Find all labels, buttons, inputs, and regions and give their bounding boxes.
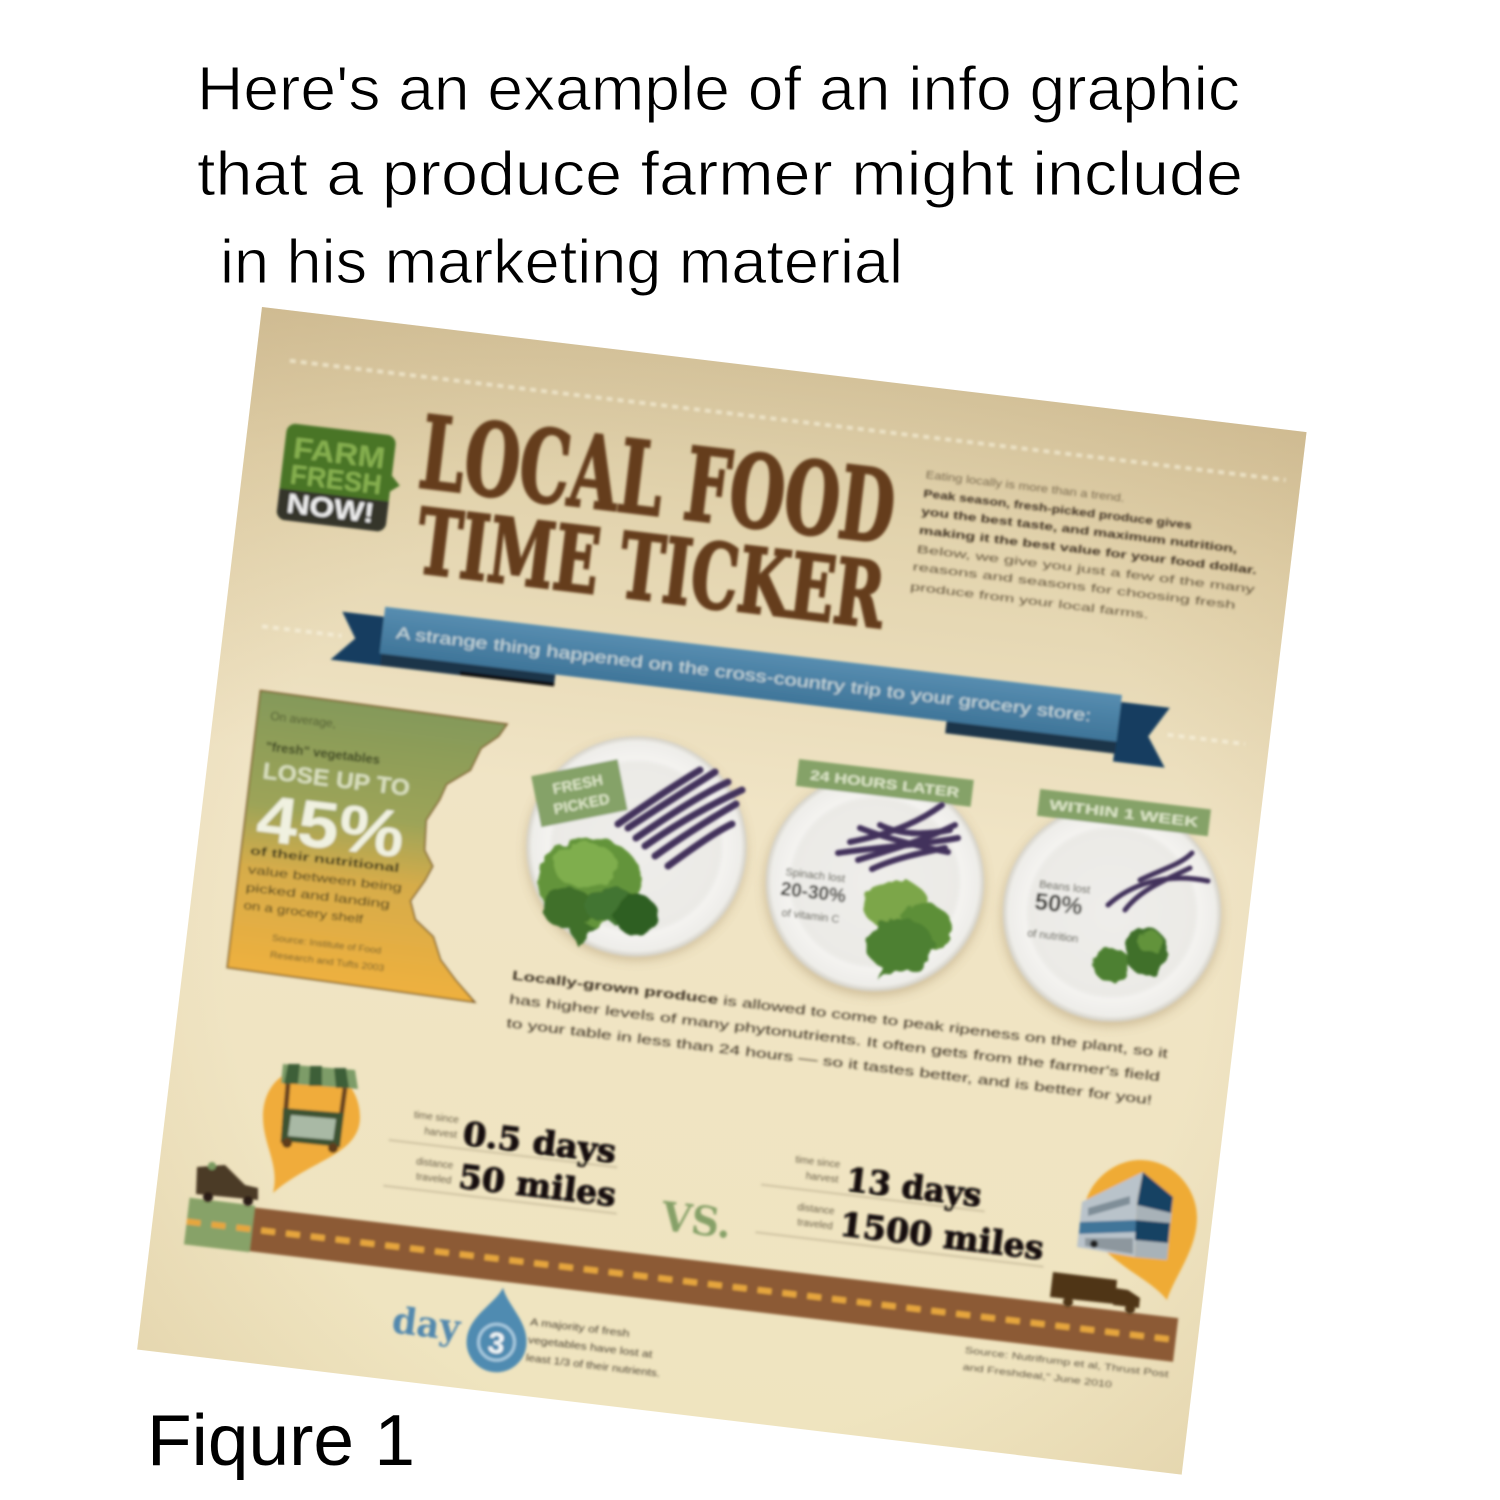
panel: lose up to 45%: Source: Institute of Food [271,933,382,956]
panel: lose up to 45% [227,691,509,1002]
stats: local food: 0.5 days [461,1114,618,1171]
panel: lose up to 45%: Research and Tufts 2003 [269,950,385,973]
heading: handwritten intro text [197,55,1243,297]
stats: local food: traveled [415,1172,452,1187]
plate label: beans lost: of nutrition [1027,927,1079,946]
paragraph: locally-grown produce: Locally-grown produce is allowed to come to peak ripeness on the plant, so it [511,969,1169,1061]
intro paragraph: Eating locally is more than a trend. [925,469,1125,505]
panel: tilted Local Food Time Ticker poster [137,307,1307,1475]
panel: lose up to 45%: On average, [270,709,337,731]
source note [962,1345,1170,1396]
panel: lose up to 45%: of their nutritional [249,844,400,875]
poster paper background [137,307,1307,1475]
plate label: spinach lost: 20-30% [779,879,847,908]
heading: handwritten intro text: in his marketing material [220,228,903,297]
intro paragraph: Below, we give you just a few of the many [916,544,1256,596]
icon: farm truck [196,1162,258,1206]
source note: and Freshdeal," June 2010 [962,1362,1112,1390]
tag: within 1 week: WITHIN 1 WEEK [1049,796,1199,830]
stats: grocery store food: traveled [797,1217,833,1232]
badge: Farm Fresh Now: NOW! [285,487,376,529]
day 3 marker [388,1275,533,1376]
plate label: beans lost: Beans lost [1038,879,1091,897]
heading: handwritten intro text: that a produce farmer might include [197,140,1243,209]
intro paragraph: reasons and seasons for choosing fresh [912,561,1236,612]
plate label: beans lost: 50% [1033,888,1084,921]
illustration: road-side icons and produce [196,770,1208,1314]
plate 3 [989,791,1234,1039]
title: LOCAL FOOD [414,393,902,567]
plate label: spinach lost: Spinach lost [785,866,846,885]
purple beans, plate 1 [618,770,742,866]
spinach, plate 1 [538,838,658,948]
day 3 marker: day [390,1300,463,1350]
stats: local food: time since [413,1110,460,1126]
stats: grocery store food: harvest [805,1171,839,1186]
stats: grocery store food: 13 days [844,1160,984,1215]
stats: grocery store food: distance [797,1202,836,1218]
spinach, plate 3 [1093,928,1168,982]
text: a majority of fresh vegetables: A majority of fresh [529,1316,630,1340]
intro paragraph: Peak season, fresh-picked produce gives [923,488,1192,532]
tag: fresh picked: FRESH [551,772,604,798]
plate 1 [514,724,759,973]
title [404,393,902,650]
tag: fresh picked: PICKED [552,791,611,818]
panel: lose up to 45%: picked and landing [245,880,391,911]
stats: local food: distance [416,1156,454,1172]
stats: local food: harvest [424,1126,458,1141]
heading: handwritten intro text: Here's an example of an info graphic [197,55,1240,124]
panel: lose up to 45%: "fresh" vegetables [265,739,381,767]
dotted line top [290,361,1286,480]
badge: Farm Fresh Now: FRESH [288,459,384,500]
plate label: spinach lost [777,866,849,926]
paragraph: locally-grown produce: has higher levels of many phytonutrients. It often gets from the farmer's field [509,992,1161,1084]
paragraph: locally-grown produce: to your table in less than 24 hours — so it tastes better, and is better for you! [506,1016,1153,1107]
panel: lose up to 45%: LOSE UP TO [261,757,411,801]
source note: Source: Nutrifrump et al, Thrust Post [964,1345,1170,1379]
text: a majority of fresh vegetables: vegetables have lost at [527,1334,653,1361]
stats: local food [383,1105,626,1215]
stats: local food: 50 miles [457,1157,618,1214]
tag: within 1 week [1037,789,1211,836]
purple beans, plate 3 [1108,853,1208,910]
icon: delivery truck [1050,1272,1140,1314]
badge: Farm Fresh Now: FARM [291,432,387,476]
road with green field start [184,1198,1178,1363]
panel: lose up to 45%: on a grocery shelf [243,898,365,926]
icon: map pin with farm stand [263,1064,360,1193]
plate label: spinach lost: of vitamin C [781,907,840,926]
plate 2 [752,761,997,1008]
purple beans, plate 2 [838,805,958,869]
plate label: beans lost [1027,878,1091,946]
stats: grocery store food: 1500 miles [838,1204,1046,1267]
stats: grocery store food [755,1150,1053,1268]
intro paragraph: making it the best value for your food dollar. [918,525,1257,577]
tag: 24 hours later [796,759,974,807]
text: a majority of fresh vegetables [525,1316,665,1380]
badge: Farm Fresh Now [276,423,406,533]
text: a majority of fresh vegetables: least 1/3 of their nutrients. [525,1352,661,1380]
paragraph: locally-grown produce [506,969,1169,1109]
intro paragraph: produce from your local farms. [910,581,1149,622]
banner ribbon [330,601,1173,768]
title: TIME TICKER [411,489,891,650]
panel: lose up to 45%: 45% [253,780,409,871]
tag: 24 hours later: 24 HOURS LATER [809,767,960,800]
caption: figure 1: Fiqure 1 [147,1401,415,1481]
panel: lose up to 45%: value between being [247,862,403,895]
icon: map pin with supermarket [1077,1160,1197,1300]
banner ribbon: A strange thing happened on the cross-country trip to your grocery store: [395,623,1092,725]
spinach, plate 2 [863,880,952,979]
intro paragraph: you the best taste, and maximum nutrition, [921,506,1238,556]
intro paragraph [910,469,1265,634]
day 3 marker: 3 [486,1326,507,1361]
tag: fresh picked [531,759,628,827]
vs label: VS. [658,1193,734,1248]
stats: grocery store food: time since [795,1155,841,1171]
